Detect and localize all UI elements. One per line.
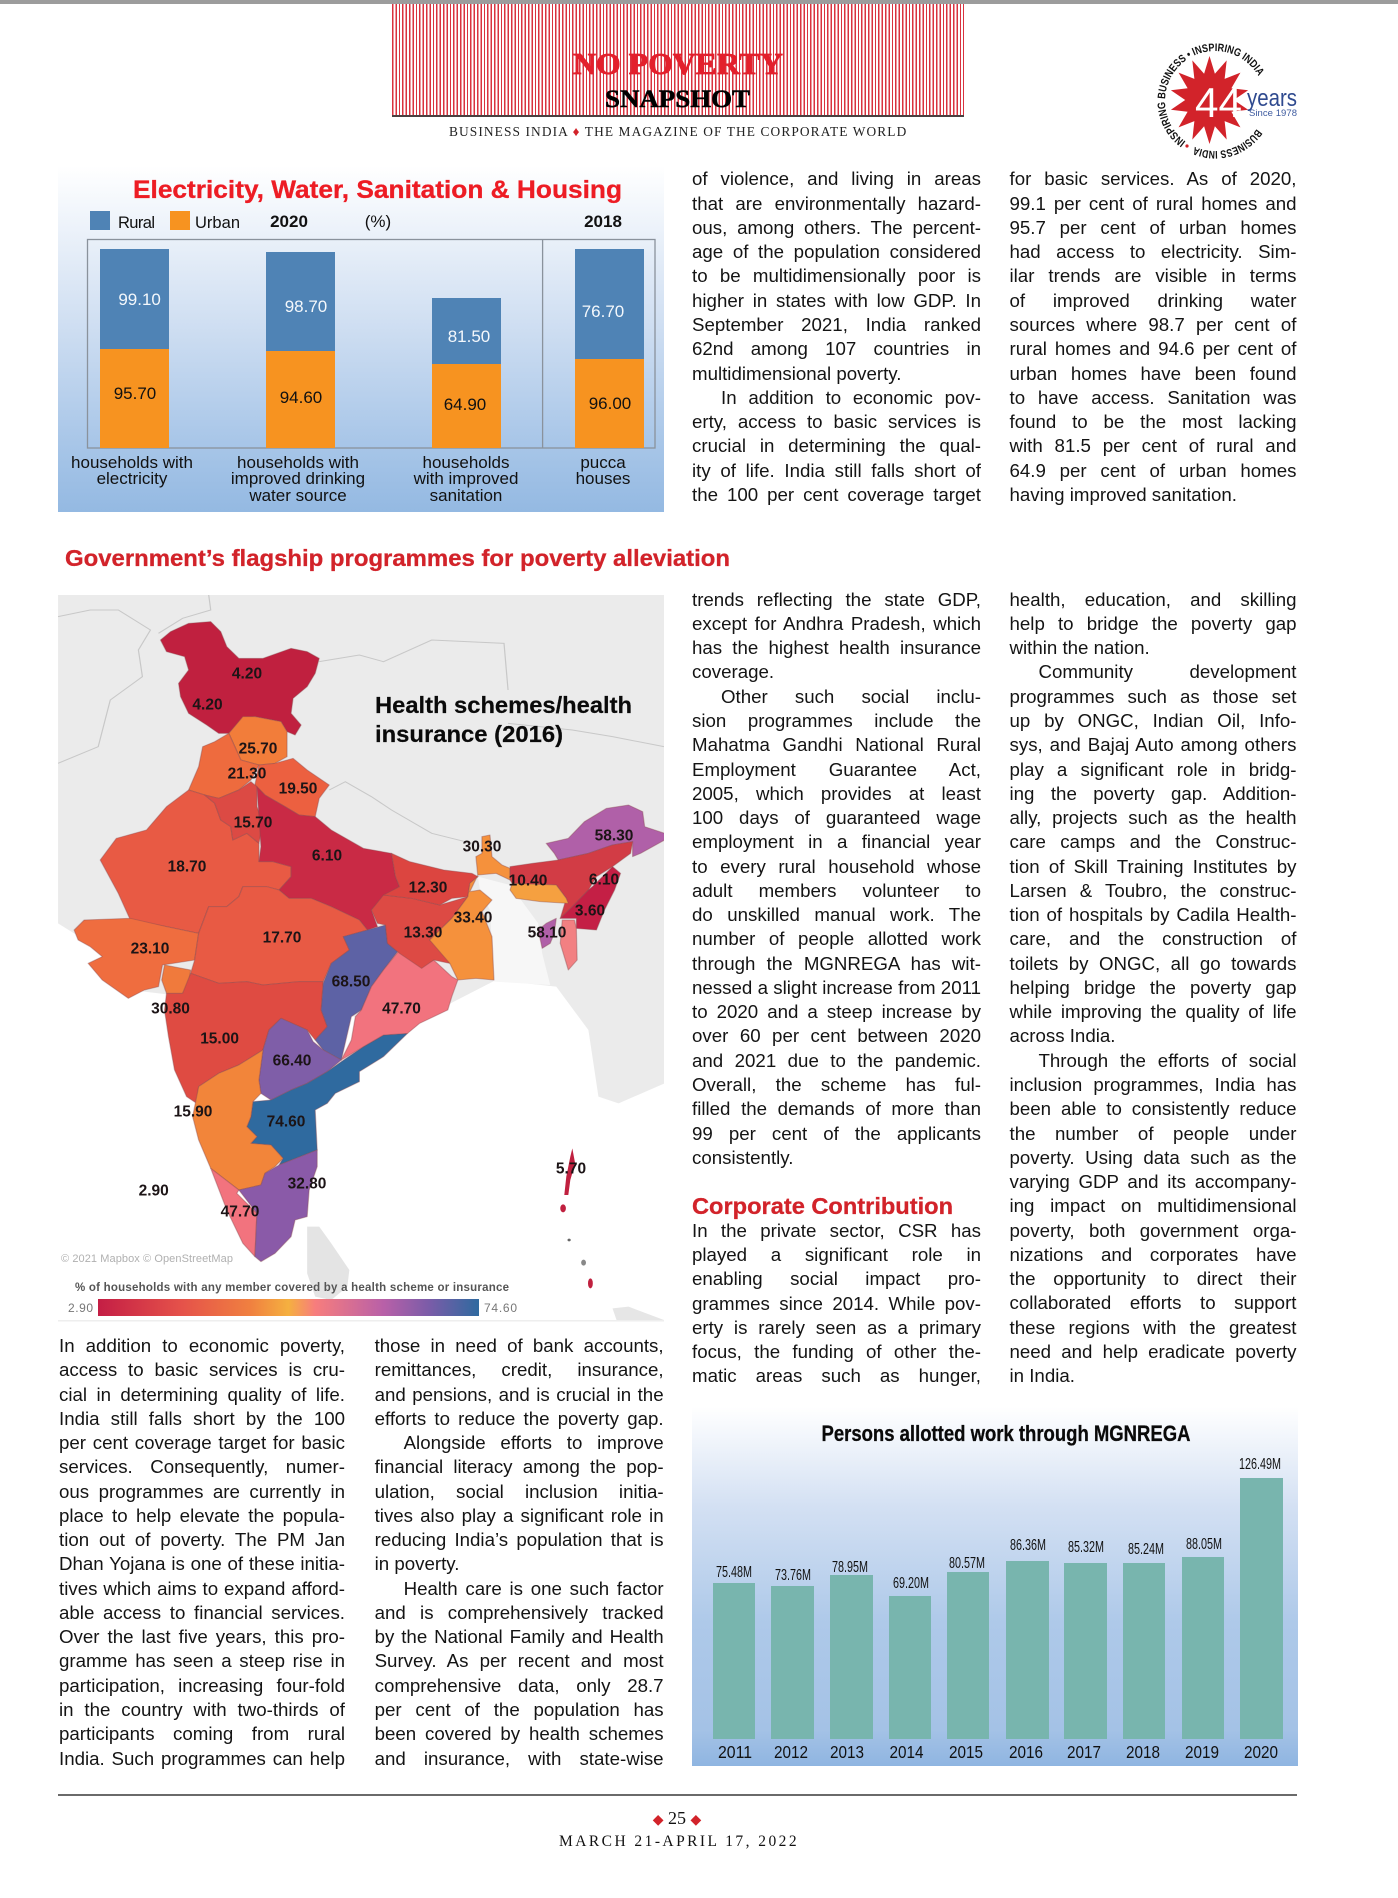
text block: column 3 middle: adult members volunteer to: [692, 880, 981, 901]
text block: column 1 bottom: tives which aims to expand afford-: [59, 1578, 345, 1599]
islands: [564, 1148, 575, 1195]
panel: electricity, water, sanitation and housing chart: with improved: [413, 469, 518, 488]
state value labels: 47.70: [382, 1000, 421, 1018]
text block: column 1 bottom: Dhan Yojana is one of these initia-: [59, 1553, 345, 1574]
text block: column 4 top: of improved drinking water: [1010, 290, 1296, 311]
panel: electricity, water, sanitation and housing chart: 64.90: [444, 395, 486, 414]
text block: column 4 middle: Community development: [1038, 661, 1296, 682]
state value labels: 6.10: [589, 872, 619, 888]
panel: India health insurance map: [58, 595, 664, 1322]
text block: column 3 middle: trends reflecting the state GDP,: [692, 589, 981, 610]
state value labels: 74.60: [267, 1114, 305, 1130]
text block: column 4 middle: care camps and the Construc-: [1010, 831, 1296, 852]
text block: column 4 middle: tion of hospitals by Cadila Health-: [1010, 904, 1296, 925]
state value labels: 18.70: [168, 858, 206, 876]
text block: corporate contribution: erty is rarely seen as a primary: [692, 1317, 981, 1338]
state value labels: 58.30: [595, 828, 633, 844]
text block: corporate contribution: enabling social impact pro-: [692, 1268, 981, 1289]
state value labels: 5.70: [556, 1160, 586, 1178]
text block: corporate contribution: grammes since 2014. While pov-: [692, 1293, 981, 1314]
text block: column 3 middle: Other such social inclu-: [721, 686, 981, 707]
text block: column 2 bottom: and insurance, with state-wise: [375, 1748, 664, 1769]
state value labels: 4.20: [232, 666, 262, 682]
panel: electricity, water, sanitation and housing chart: (%): [365, 212, 391, 231]
panel: persons allotted work through MGNREGA bar chart: 2014: [890, 1742, 924, 1762]
panel: electricity, water, sanitation and housing chart: households with: [71, 453, 193, 472]
panel: electricity, water, sanitation and housing chart: 99.10: [118, 290, 161, 309]
panel: persons allotted work through MGNREGA bar chart: 85.32M: [1068, 1539, 1104, 1556]
text block: column 2 bottom: ulation, social inclusion initia-: [375, 1481, 664, 1502]
text block: column 1 bottom: India still falls short by the 100: [59, 1408, 345, 1429]
text block: column 3 middle: [692, 589, 981, 1168]
header banner: title on red stripes: NO POVERTY: [573, 46, 783, 81]
state value labels: 19.50: [279, 780, 317, 798]
text block: column 4 middle: up by ONGC, Indian Oil, Info-: [1010, 710, 1296, 731]
text block: column 3 middle: Employment Guarantee Act,: [692, 759, 981, 780]
text block: column 1 bottom: participants coming from rural: [59, 1723, 345, 1744]
state value labels: 3.60: [575, 902, 605, 920]
text block: column 2 bottom: and pensions, and is crucial in the: [375, 1384, 664, 1405]
logo: 44 years: BUSINESS INDIA: [1194, 129, 1262, 159]
text block: column 2 bottom: those in need of bank accounts,: [375, 1335, 664, 1356]
text block: column 1 bottom: place to help elevate the popula-: [59, 1505, 345, 1526]
text block: column 3 middle: sion programmes include the: [692, 710, 981, 731]
text block: column 4 middle: tion of Skill Training Institutes by: [1010, 856, 1296, 877]
text block: column 2 bottom: by the National Family and Health: [375, 1626, 664, 1647]
text block: column 4 middle: care, and the construction of: [1010, 928, 1296, 949]
panel: persons allotted work through MGNREGA bar chart: 2012: [774, 1742, 808, 1762]
panel: persons allotted work through MGNREGA bar chart: 2017: [1067, 1742, 1101, 1762]
text block: column 1 bottom: [59, 1335, 345, 1769]
text block: column 1 bottom: participation, increasing four-fold: [59, 1675, 345, 1696]
text block: column 4 top: found to be the most lacking: [1010, 411, 1296, 432]
panel: electricity, water, sanitation and housing chart: 81.50: [448, 327, 490, 346]
text block: column 4 middle: ing the poverty gap. Addition-: [1010, 783, 1296, 804]
text block: column 2 bottom: per cent of the population has: [375, 1699, 664, 1720]
text block: column 3 middle: 100 days of guaranteed wage: [692, 807, 981, 828]
text block: column 4 middle: ing impact on multidimensional: [1010, 1195, 1296, 1216]
text block: column 4 middle: within the nation.: [1010, 637, 1150, 658]
state shapes: [160, 622, 319, 735]
text block: column 4 middle: play a significant role in bridg-: [1010, 759, 1296, 780]
text block: column 4 middle: Through the efforts of social: [1038, 1050, 1296, 1071]
panel: electricity, water, sanitation and housing chart: pucca: [580, 453, 626, 472]
text block: column 3 middle: number of people allotted work: [692, 928, 981, 949]
state value labels: 6.10: [312, 848, 342, 864]
panel: persons allotted work through MGNREGA bar chart: 85.24M: [1128, 1541, 1164, 1558]
text block: column 2 bottom: Survey. As per recent and most: [375, 1650, 664, 1671]
text block: column 4 top: rural homes and 94.6 per cent of: [1010, 338, 1296, 359]
text block: corporate contribution: In the private sector, CSR has: [692, 1220, 981, 1241]
text block: column 1 bottom: tion out of poverty. The PM Jan: [59, 1529, 345, 1550]
text block: column 2 bottom: remittances, credit, insurance,: [375, 1359, 664, 1380]
top grey page edge: [0, 0, 1398, 4]
panel: persons allotted work through MGNREGA bar chart: 80.57M: [949, 1555, 985, 1572]
panel: electricity, water, sanitation and housing chart: 95.70: [114, 384, 156, 403]
panel: electricity, water, sanitation and housing chart: Rural: [118, 214, 155, 232]
text block: column 1 bottom: cial in determining quality of life.: [59, 1384, 345, 1405]
text block: column 4 top: to have access. Sanitation was: [1010, 387, 1296, 408]
colour legend: 2.90: [68, 1301, 93, 1315]
text block: column 1 bottom: ous programmes are currently in: [59, 1481, 345, 1502]
text block: column 3 middle: except for Andhra Pradesh, which: [692, 613, 981, 634]
text block: column 3 top: ity of life. India still falls short of: [692, 460, 981, 481]
panel: persons allotted work through MGNREGA bar chart: 69.20M: [893, 1575, 929, 1592]
text block: column 4 top: had access to electricity. Sim-: [1010, 241, 1296, 262]
panel: electricity, water, sanitation and housing chart: sanitation: [430, 486, 502, 505]
text block: column 4 top: sources where 98.7 per cent of: [1010, 314, 1296, 335]
panel: electricity, water, sanitation and housing chart: 2020: [270, 212, 308, 231]
logo: 44 years: INSPIRING BUSINESS • INSPIRING INDIA: [1158, 44, 1264, 148]
state value labels: 15.70: [234, 814, 272, 832]
text block: column 4 middle: in India.: [1010, 1365, 1075, 1386]
state value labels: 23.10: [131, 940, 169, 958]
state value labels: 32.80: [288, 1176, 326, 1192]
panel: persons allotted work through MGNREGA bar chart: 86.36M: [1010, 1537, 1046, 1554]
text block: column 4 middle: the opportunity to direct their: [1010, 1268, 1296, 1289]
text block: column 2 bottom: been covered by health schemes: [375, 1723, 664, 1744]
text block: column 3 top: to be multidimensionally poor is: [692, 265, 981, 286]
text block: column 4 middle: while improving the quality of life: [1010, 1001, 1296, 1022]
footer rule: [58, 1794, 1297, 1796]
state value labels: 58.10: [528, 924, 566, 942]
panel: persons allotted work through MGNREGA bar chart: 2019: [1185, 1742, 1219, 1762]
state value labels: 2.90: [139, 1182, 169, 1200]
text block: column 3 middle: Mahatma Gandhi National Rural: [692, 734, 981, 755]
panel: electricity, water, sanitation and housing chart: 96.00: [589, 394, 631, 413]
panel: persons allotted work through MGNREGA bar chart: 2018: [1126, 1742, 1160, 1762]
panel: electricity, water, sanitation and housing chart: households: [423, 453, 509, 472]
text block: column 4 middle: the number of people under: [1010, 1123, 1296, 1144]
text block: column 4 top: 64.9 per cent of urban homes: [1010, 460, 1296, 481]
text block: column 3 middle: consistently.: [692, 1147, 793, 1168]
state value labels: 13.30: [404, 924, 442, 942]
text block: column 4 top: 99.1 per cent of rural homes and: [1010, 193, 1296, 214]
text block: corporate contribution: matic areas such as hunger,: [692, 1365, 981, 1386]
text block: column 4 top: with 81.5 per cent of rural and: [1010, 435, 1296, 456]
text block: column 3 middle: 99 per cent of the applicants: [692, 1123, 981, 1144]
text block: corporate contribution: played a significant role in: [692, 1244, 981, 1265]
text block: column 4 middle: programmes such as those set: [1010, 686, 1296, 707]
text block: column 1 bottom: in the country with two-thirds of: [59, 1699, 345, 1720]
state value labels: 47.70: [221, 1204, 259, 1220]
text block: column 3 middle: employment in a financial year: [692, 831, 981, 852]
text block: column 3 top: ous, among others. The percent-: [692, 217, 981, 238]
text block: column 1 bottom: per cent coverage target for basic: [59, 1432, 345, 1453]
text block: column 2 bottom: financial literacy among the pop-: [375, 1456, 664, 1477]
panel: electricity, water, sanitation and housing chart: 94.60: [280, 388, 322, 407]
state value labels: 15.90: [174, 1104, 212, 1120]
panel: electricity, water, sanitation and housing chart: houses: [576, 469, 630, 488]
text block: column 3 middle: nessed a slight increase from 2011: [692, 977, 981, 998]
state value labels: 10.40: [509, 872, 547, 890]
text block: column 3 middle: over 60 per cent between 2020: [692, 1025, 981, 1046]
text block: column 4 top: ilar trends are visible in terms: [1010, 265, 1296, 286]
text block: column 4 middle: varying GDP and its accompany-: [1010, 1171, 1296, 1192]
text block: column 3 top: age of the population considered: [692, 241, 981, 262]
text block: column 3 top: September 2021, India ranked: [692, 314, 981, 335]
state value labels: 21.30: [228, 766, 266, 782]
text block: column 3 top: of violence, and living in areas: [692, 168, 981, 189]
panel: electricity, water, sanitation and housing chart: households with: [237, 453, 359, 472]
map title: Health schemes/health: [375, 692, 632, 718]
text block: column 3 middle: to every rural household whose: [692, 856, 981, 877]
text block: column 4 middle: Larsen & Toubro, the construc-: [1010, 880, 1296, 901]
panel: persons allotted work through MGNREGA bar chart: 2013: [830, 1742, 864, 1762]
text block: column 4 middle: need and help eradicate poverty: [1010, 1341, 1296, 1362]
panel: persons allotted work through MGNREGA bar chart: 2015: [949, 1742, 983, 1762]
text block: column 1 bottom: gramme has seen a steep rise in: [59, 1650, 345, 1671]
text block: column 4 top: [1010, 168, 1296, 505]
text block: column 1 bottom: able access to financial services.: [59, 1602, 345, 1623]
panel: persons allotted work through MGNREGA bar chart: 78.95M: [832, 1559, 868, 1576]
header banner: title on red stripes: SNAPSHOT: [605, 86, 750, 113]
text block: column 1 bottom: India. Such programmes can help: [59, 1748, 345, 1769]
panel: electricity, water, sanitation and housing chart: improved drinking: [231, 469, 365, 488]
panel: persons allotted work through MGNREGA bar chart: 73.76M: [775, 1567, 811, 1584]
colour legend: 74.60: [484, 1301, 517, 1315]
text block: column 3 top: erty, access to basic services is: [692, 411, 981, 432]
text block: column 2 bottom: Alongside efforts to improve: [404, 1432, 664, 1453]
issue date: MARCH 21-APRIL 17, 2022: [559, 1833, 799, 1850]
logo: 44 years: 44: [1195, 79, 1242, 126]
panel: electricity, water, sanitation and housing chart: Electricity, Water, Sanitation & Housing: [133, 176, 622, 204]
state value labels: 25.70: [239, 740, 277, 758]
text block: column 2 bottom: [374, 1335, 664, 1769]
panel: persons allotted work through MGNREGA bar chart: 88.05M: [1186, 1536, 1222, 1553]
text block: column 3 middle: 2005, which provides at least: [692, 783, 981, 804]
state value labels: 12.30: [409, 880, 447, 896]
text block: column 2 bottom: comprehensive data, only 28.7: [375, 1675, 664, 1696]
text block: column 3 top: [692, 168, 981, 505]
state value labels: 30.80: [151, 1000, 190, 1018]
text block: column 3 middle: has the highest health insurance: [692, 637, 981, 658]
state value labels: 4.20: [192, 696, 223, 714]
text block: column 4 middle: these regions with the greatest: [1010, 1317, 1296, 1338]
text block: column 4 top: 95.7 per cent of urban homes: [1010, 217, 1296, 238]
text block: column 4 middle: toilets by ONGC, all go towards: [1010, 953, 1296, 974]
text block: column 3 top: crucial in determining the qual-: [692, 435, 981, 456]
page number: ◆ 25 ◆: [653, 1808, 701, 1828]
panel: electricity, water, sanitation and housing chart: 98.70: [285, 297, 327, 316]
colour legend: [58, 1282, 664, 1322]
text block: column 4 middle: helping bridge the poverty gap: [1010, 977, 1296, 998]
text block: column 3 middle: and 2021 due to the pandemic.: [692, 1050, 981, 1071]
logo: 44 years: years: [1247, 85, 1297, 112]
panel: electricity, water, sanitation and housing chart: 2018: [584, 212, 622, 231]
magazine tagline: BUSINESS INDIA ♦ THE MAGAZINE OF THE CORPORATE WORLD: [449, 124, 907, 139]
text block: column 4 middle: been able to consistently reduce: [1010, 1098, 1296, 1119]
state value labels: 17.70: [263, 930, 301, 946]
text block: corporate contribution: [692, 1220, 981, 1386]
text block: column 4 top: urban homes have been found: [1010, 363, 1296, 384]
text block: column 3 middle: do unskilled manual work. The: [692, 904, 981, 925]
state value labels: [131, 666, 633, 1220]
text block: column 1 bottom: services. Consequently, numer-: [59, 1456, 345, 1477]
map title: insurance (2016): [375, 721, 563, 747]
panel: electricity, water, sanitation and housing chart: water source: [248, 486, 347, 505]
text block: column 3 top: the 100 per cent coverage target: [692, 484, 981, 505]
text block: column 2 bottom: and is comprehensively tracked: [375, 1602, 664, 1623]
text block: column 4 top: having improved sanitation.: [1010, 484, 1237, 505]
state value labels: 15.00: [200, 1030, 239, 1048]
text block: column 3 top: that are environmentally hazard-: [692, 193, 981, 214]
state value labels: 66.40: [273, 1052, 311, 1070]
text block: column 1 bottom: Over the last five years, this pro-: [59, 1626, 345, 1647]
text block: column 4 middle: across India.: [1010, 1025, 1115, 1046]
panel: electricity, water, sanitation and housing chart: [58, 176, 664, 512]
panel: persons allotted work through MGNREGA bar chart: 75.48M: [716, 1564, 752, 1581]
state value labels: 33.40: [454, 910, 492, 926]
map title: [375, 692, 632, 747]
text block: column 4 middle: help to bridge the poverty gap: [1010, 613, 1296, 634]
text block: column 3 middle: to 2020 and a steep increase by: [692, 1001, 981, 1022]
panel: persons allotted work through MGNREGA bar chart: [692, 1421, 1298, 1766]
colour legend: % of households with any member covered by a health scheme or insurance: [75, 1282, 509, 1294]
map credit: © 2021 Mapbox © OpenStreetMap: [61, 1253, 233, 1265]
text block: column 4 middle: health, education, and skilling: [1010, 589, 1296, 610]
text block: column 2 bottom: tives also play a significant role in: [375, 1505, 664, 1526]
heading: flagship programmes: Government’s flagship programmes for poverty alleviation: [65, 545, 730, 571]
panel: electricity, water, sanitation and housing chart: Urban: [195, 214, 240, 232]
text block: column 4 middle: poverty, both government orga-: [1010, 1220, 1296, 1241]
state value labels: 68.50: [332, 974, 370, 990]
panel: persons allotted work through MGNREGA bar chart: 2011: [718, 1742, 752, 1762]
text block: column 3 middle: through the MGNREGA has wit-: [692, 953, 981, 974]
logo: 44 years: [1158, 44, 1297, 159]
text block: column 4 middle: nizations and corporates have: [1010, 1244, 1296, 1265]
text block: column 3 top: higher in states with low GDP. In: [692, 290, 981, 311]
text block: column 3 middle: Overall, the scheme has ful-: [692, 1074, 981, 1095]
heading: corporate contribution: Corporate Contribution: [692, 1193, 953, 1219]
text block: column 4 middle: sys, and Bajaj Auto among others: [1010, 734, 1296, 755]
text block: column 2 bottom: Health care is one such factor: [404, 1578, 664, 1599]
text block: column 2 bottom: in poverty.: [375, 1553, 459, 1574]
text block: column 4 middle: collaborated efforts to support: [1010, 1292, 1296, 1313]
text block: corporate contribution: focus, the funding of other the-: [692, 1341, 981, 1362]
panel: persons allotted work through MGNREGA bar chart: 2016: [1009, 1742, 1043, 1762]
text block: column 4 middle: ally, projects such as the health: [1010, 807, 1296, 828]
panel: persons allotted work through MGNREGA bar chart: Persons allotted work through MGNREGA: [822, 1421, 1191, 1446]
text block: column 4 middle: [1010, 589, 1296, 1386]
text block: column 3 top: multidimensional poverty.: [692, 363, 901, 384]
state value labels: 30.30: [463, 838, 501, 856]
text block: column 1 bottom: In addition to economic poverty,: [59, 1335, 345, 1356]
text block: column 4 top: for basic services. As of 2020,: [1010, 168, 1296, 189]
text block: column 2 bottom: reducing India’s population that is: [375, 1529, 664, 1550]
panel: electricity, water, sanitation and housing chart: electricity: [97, 469, 168, 488]
text block: column 4 middle: poverty. Using data such as the: [1010, 1147, 1296, 1168]
panel: persons allotted work through MGNREGA bar chart: 2020: [1244, 1742, 1278, 1762]
text block: column 3 top: In addition to economic pov-: [721, 387, 981, 408]
text block: column 2 bottom: efforts to reduce the poverty gap.: [375, 1408, 664, 1429]
text block: column 3 middle: coverage.: [692, 661, 774, 682]
text block: column 4 middle: inclusion programmes, India has: [1010, 1074, 1296, 1095]
text block: column 3 middle: filled the demands of more than: [692, 1098, 981, 1119]
logo: 44 years: Since 1978: [1249, 108, 1297, 119]
text block: column 1 bottom: access to basic services is cru-: [59, 1359, 345, 1380]
panel: electricity, water, sanitation and housing chart: 76.70: [582, 302, 624, 321]
header banner: title on red stripes: [392, 4, 964, 117]
text block: column 3 top: 62nd among 107 countries in: [692, 338, 981, 359]
